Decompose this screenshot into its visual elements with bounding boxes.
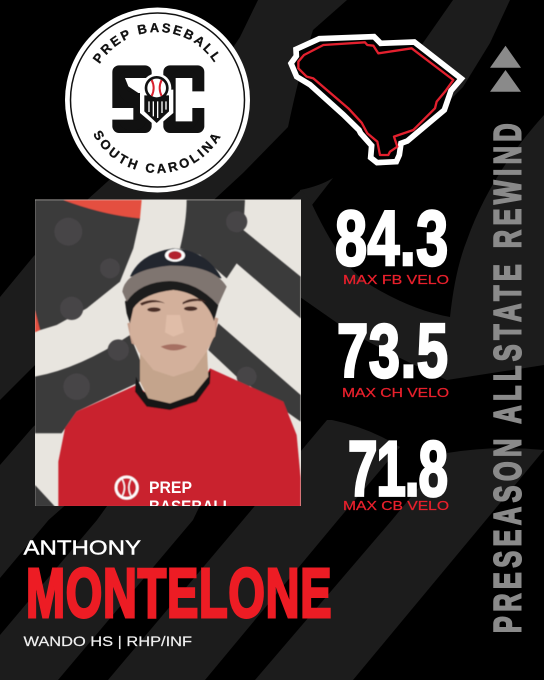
logo: SC monogram with baseball shield xyxy=(112,52,205,149)
logo: Prep Baseball South Carolina badge: PREP BASEBALL xyxy=(92,23,219,64)
stat: max fastball velocity: MAX FB VELO xyxy=(343,273,449,287)
stat: max fastball velocity: 84.3 xyxy=(335,195,448,282)
photo: shirt collar xyxy=(135,370,211,410)
player last name: MONTELONE xyxy=(26,554,332,632)
photo: banner logo marks xyxy=(54,211,257,400)
stat: max changeup velocity: MAX CH VELO xyxy=(342,386,449,400)
logo: Prep Baseball South Carolina badge: SOUTH CAROLINA xyxy=(94,130,221,174)
icon: rewind double triangles xyxy=(490,46,521,92)
photo: shirt logo xyxy=(116,477,137,498)
photo: eyes and mouth xyxy=(140,299,207,350)
logo: SC monogram with baseball shield: S xyxy=(115,52,150,149)
photo: shirt wordmark xyxy=(150,482,226,506)
photo: hair xyxy=(125,280,218,323)
stat: max changeup velocity: 73.5 xyxy=(337,309,448,394)
photo: face xyxy=(130,288,215,377)
stat: max curveball velocity: MAX CB VELO xyxy=(343,499,449,513)
vertical title: Preseason Allstate Rewind: PRESEASON ALLSTATE REWIND xyxy=(486,123,529,633)
photo: banner red accents xyxy=(35,200,142,332)
photo: neck xyxy=(139,351,210,404)
player photo xyxy=(35,200,301,516)
stat: max curveball velocity: 71.8 xyxy=(348,427,448,513)
logo: SC monogram with baseball shield: C xyxy=(164,52,202,149)
logo: Prep Baseball South Carolina badge xyxy=(65,8,250,192)
school and position: WANDO HS | RHP/INF xyxy=(24,633,192,649)
photo: player shirt xyxy=(58,368,301,507)
photo: ears xyxy=(127,317,218,347)
photo: cap logo xyxy=(165,249,185,262)
photo: banner dark panels xyxy=(35,200,301,507)
player first name: ANTHONY xyxy=(24,538,141,560)
photo: cap xyxy=(130,248,222,278)
icon: South Carolina state outline xyxy=(291,37,461,163)
photo: shirt wordmark: BASEBALL xyxy=(149,497,232,516)
photo: shirt wordmark: PREP xyxy=(149,478,192,497)
